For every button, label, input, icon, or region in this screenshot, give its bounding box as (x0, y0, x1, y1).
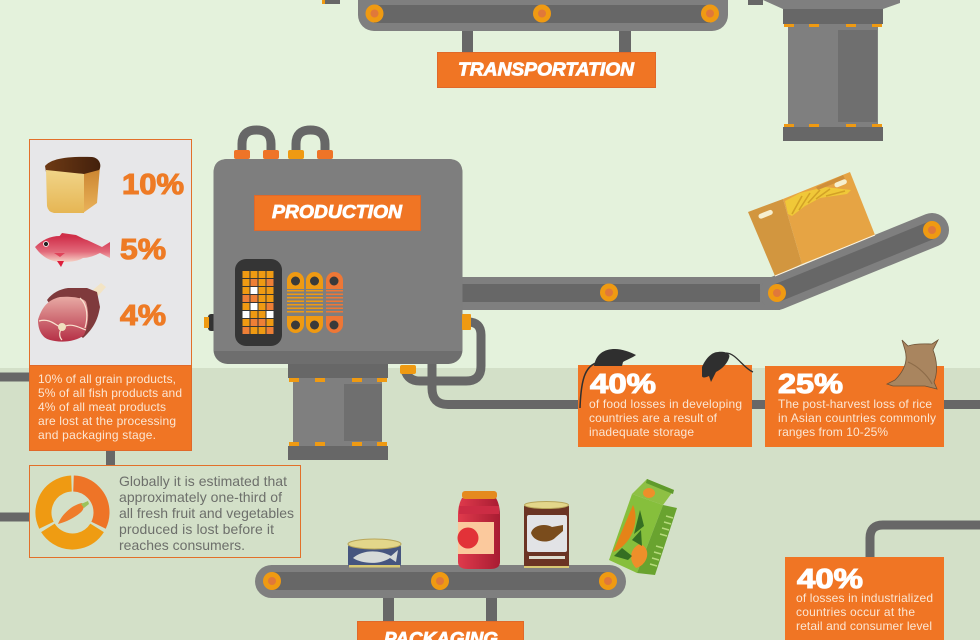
label: production (254, 196, 420, 230)
text: 4%: 4% (120, 300, 166, 332)
text block: processing and packaging: and packaging stage. (38, 428, 156, 442)
text block: processing and packaging: 10% of all grain products, (38, 372, 176, 386)
donut chart (33, 473, 112, 552)
text block: processing and packaging: 4% of all meat products (38, 400, 166, 414)
callout: 40% developing countries: 40% (590, 368, 656, 399)
callout: 40% developing countries: countries are a result of (589, 411, 718, 425)
icon: bread (45, 157, 100, 213)
coil units (287, 272, 343, 333)
callout: 40% developing countries: of food losses in developing (589, 397, 742, 411)
text: 10%: 10% (122, 169, 184, 201)
callout: 40% developing countries: inadequate storage (589, 425, 694, 439)
handles (234, 130, 333, 159)
label: production: PRODUCTION (272, 202, 403, 222)
connector pipes (0, 322, 980, 558)
tower: below production (288, 364, 388, 460)
callout: 25% rice: ranges from 10-25% (778, 425, 888, 439)
icon: ham (38, 283, 106, 342)
control screen (235, 259, 282, 346)
icon: rat on right (702, 352, 753, 382)
callout: 40% industrialized countries: countries occur at the (796, 605, 915, 619)
icon: sack (887, 340, 938, 389)
callout: 40% industrialized countries (785, 557, 944, 640)
icon: juice carton (609, 479, 677, 575)
icon: carrot (58, 501, 89, 524)
panel: fruit and vegetables: reaches consumers. (119, 537, 245, 553)
panel: food loss percentages (30, 140, 192, 366)
text block: processing and packaging: are lost at the processing (38, 414, 176, 428)
callout: 25% rice: 25% (778, 368, 843, 399)
text block: processing and packaging (30, 366, 192, 450)
icon: fish (35, 233, 110, 267)
callout: 40% industrialized countries: 40% (797, 563, 863, 594)
text block: processing and packaging: 5% of all fish products and (38, 386, 182, 400)
tower: upper right (748, 0, 900, 141)
production machine (204, 130, 471, 374)
icon: rat on left (580, 349, 636, 408)
label: packaging (358, 622, 524, 640)
side nub (204, 314, 216, 331)
panel: fruit and vegetables (30, 466, 300, 558)
panel: fruit and vegetables: Globally it is estimated that (119, 473, 287, 489)
right pipe fitting (462, 314, 471, 330)
panel: fruit and vegetables: all fresh fruit and vegetables (119, 505, 294, 521)
label: transportation: TRANSPORTATION (458, 60, 635, 80)
icon: crate of grain (748, 172, 875, 276)
icon: canned chicken (524, 502, 569, 568)
callout: 40% developing countries (578, 365, 752, 447)
icon: tuna can (348, 539, 401, 568)
callout: 25% rice: in Asian countries commonly (778, 411, 936, 425)
icon: jam jar (458, 491, 500, 569)
callout: 40% industrialized countries: retail and consumer level (796, 619, 932, 633)
lower pipe fitting (400, 365, 416, 374)
callout: 40% industrialized countries: of losses in industrialized (796, 591, 933, 605)
callout: 25% rice: The post-harvest loss of rice (778, 397, 932, 411)
main conveyor (455, 221, 941, 310)
text: 5%: 5% (120, 234, 166, 266)
top conveyor: transportation (322, 0, 728, 53)
label: transportation (438, 52, 656, 88)
callout: 25% rice (765, 366, 944, 447)
panel: fruit and vegetables: produced is lost before it (119, 521, 274, 537)
panel: fruit and vegetables: approximately one-third of (119, 489, 282, 505)
bottom conveyor: packaging (255, 565, 626, 622)
